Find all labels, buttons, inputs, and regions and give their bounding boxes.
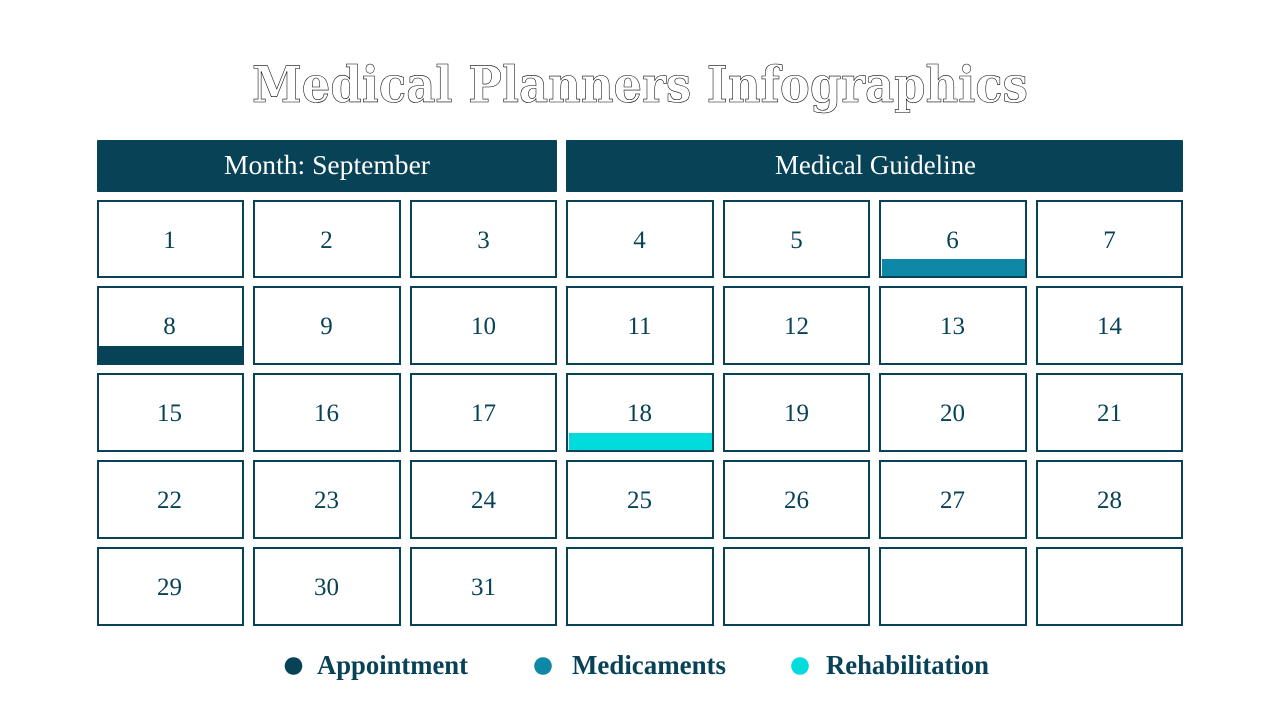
day 23: [254, 461, 400, 538]
day 4: [567, 201, 713, 277]
empty cell 3: [880, 548, 1026, 625]
header: month: [97, 140, 557, 192]
day 26: [724, 461, 869, 538]
day 28: 28: [1097, 487, 1122, 514]
day 26: 26: [784, 487, 809, 514]
day 25: 25: [627, 487, 652, 514]
header: medical guideline: Medical Guideline: [775, 150, 976, 180]
day 9: 9: [320, 313, 333, 340]
day 21: 21: [1097, 400, 1122, 427]
day 8 with appointment bar: 8: [163, 313, 176, 340]
legend: medicaments: Medicaments: [572, 650, 726, 680]
day 13: [880, 287, 1026, 364]
day 8 with appointment bar: [97, 287, 244, 365]
day 22: 22: [157, 487, 182, 514]
day 16: [254, 374, 400, 451]
day 28: [1037, 461, 1182, 538]
day 13: 13: [940, 313, 965, 340]
empty cell 4: [1037, 548, 1182, 625]
day 16: 16: [314, 400, 339, 427]
day 20: 20: [940, 400, 965, 427]
day 2: 2: [320, 227, 333, 254]
empty cell 1: [567, 548, 713, 625]
day 20: [880, 374, 1026, 451]
day 7: 7: [1103, 227, 1116, 254]
day 14: [1037, 287, 1182, 364]
day 30: 30: [314, 574, 339, 601]
day 2: [254, 201, 400, 277]
day 18 with rehabilitation bar: [567, 374, 713, 451]
header: month: Month: September: [224, 150, 430, 180]
day 3: 3: [477, 227, 490, 254]
day 14: 14: [1097, 313, 1122, 340]
day 27: [880, 461, 1026, 538]
day 10: 10: [471, 313, 496, 340]
day 19: [724, 374, 869, 451]
day 7: [1037, 201, 1182, 277]
day 23: 23: [314, 487, 339, 514]
day 3: [411, 201, 556, 277]
day 24: 24: [471, 487, 496, 514]
day 6 with medicaments bar: 6: [946, 227, 959, 254]
day 17: 17: [471, 400, 496, 427]
day 31: [411, 548, 556, 625]
day 5: [724, 201, 869, 277]
day 24: [411, 461, 556, 538]
day 29: 29: [157, 574, 182, 601]
day 6 with medicaments bar: [880, 201, 1026, 277]
day 15: 15: [157, 400, 182, 427]
day 21: [1037, 374, 1182, 451]
day 1: 1: [163, 227, 176, 254]
day 31: 31: [471, 574, 496, 601]
day 30: [254, 548, 400, 625]
legend: rehabilitation: Rehabilitation: [826, 650, 989, 680]
day 12: [724, 287, 869, 364]
day 11: [567, 287, 713, 364]
day 27: 27: [940, 487, 965, 514]
day 15: [98, 374, 243, 451]
day 5: 5: [790, 227, 803, 254]
day 19: 19: [784, 400, 809, 427]
calendar grid: [97, 201, 1182, 625]
day 4: 4: [633, 227, 646, 254]
day 18 with rehabilitation bar: 18: [627, 400, 652, 427]
day 12: 12: [784, 313, 809, 340]
day 29: [98, 548, 243, 625]
day 9: [254, 287, 400, 364]
day 17: [411, 374, 556, 451]
legend: appointment: Appointment: [317, 650, 468, 680]
day 10: [411, 287, 556, 364]
day 22: [98, 461, 243, 538]
empty cell 2: [724, 548, 869, 625]
legend: [285, 650, 989, 680]
day 25: [567, 461, 713, 538]
title: Medical Planners Infographics: [252, 55, 1028, 114]
header: medical guideline: [566, 140, 1183, 192]
day 1: [98, 201, 243, 277]
day 11: 11: [627, 313, 652, 340]
